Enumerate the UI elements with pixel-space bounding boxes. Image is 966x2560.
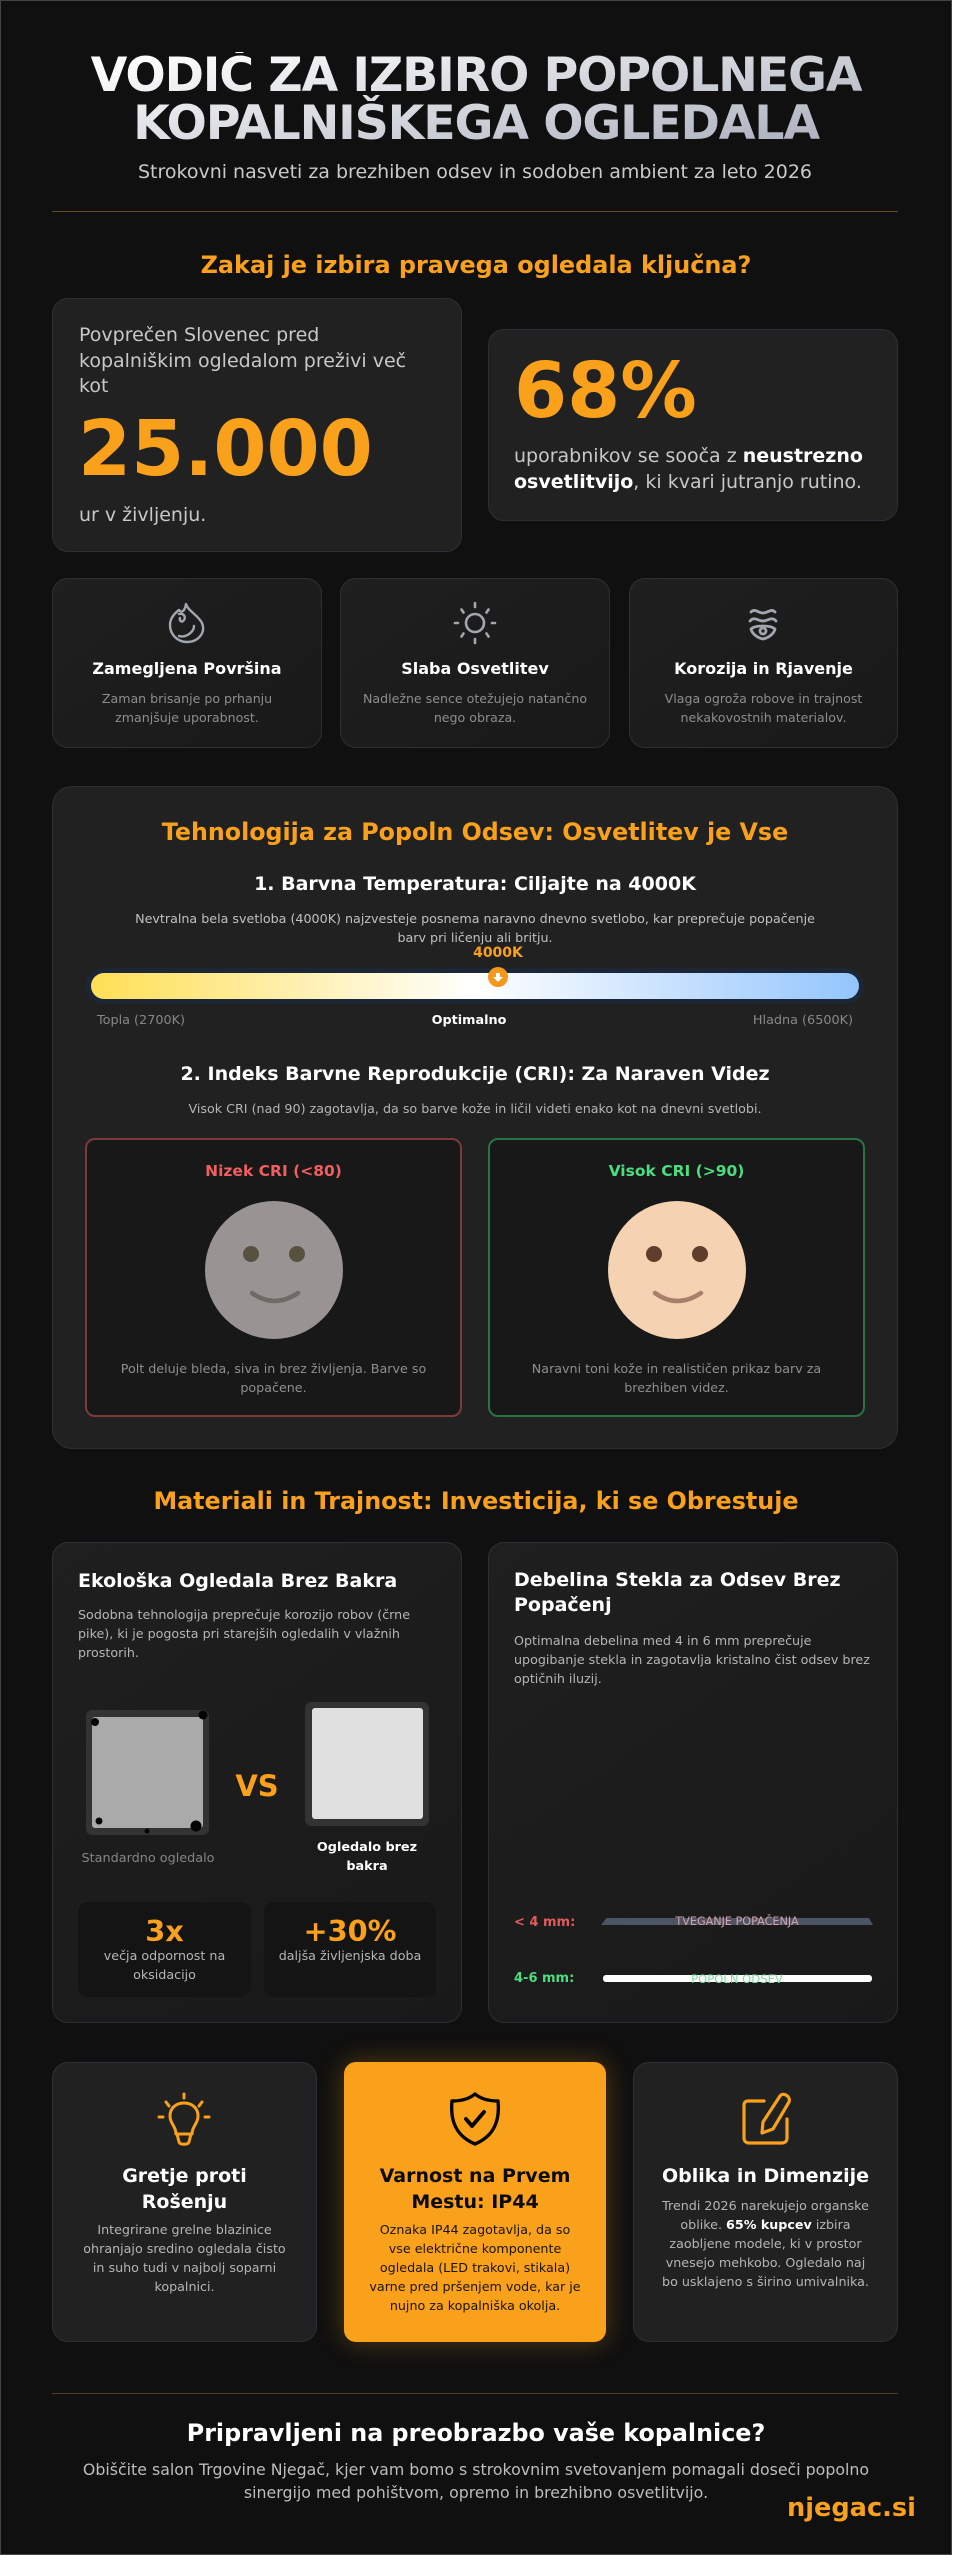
stat text: večja odpornost na [104, 1948, 225, 1963]
stat intro text: kopalniškim ogledalom preživi več [79, 350, 406, 372]
icon: waves and corrosion [748, 609, 778, 640]
face: natural [608, 1201, 746, 1339]
footer text: sinergijo med pohištvom, opremo in brezhibno osvetlitvijo. [244, 2483, 708, 2502]
high CRI text: brezhiben videz. [624, 1380, 729, 1395]
colour temperature text: Nevtralna bela svetloba (4000K) najzvesteje posnema naravno dnevno svetlobo, kar preprečuje popačenje [135, 911, 815, 926]
card text: oblike. 65% kupcev izbira [680, 2217, 851, 2232]
card text: Zaman brisanje po prhanju [102, 691, 272, 706]
stat text: daljša življenjska doba [279, 1948, 421, 1963]
card text: prostorih. [78, 1645, 139, 1660]
card text: nego obraza. [434, 710, 516, 725]
mirror label: copper-free [317, 1840, 417, 1874]
stat value: +30%: +30% [303, 1914, 397, 1948]
card text: nekakovostnih materialov. [681, 710, 846, 725]
panel: corrosion [629, 578, 898, 748]
mirror: copper-free [305, 1702, 429, 1826]
card text: vnesejo mehkobo. Ogledalo naj [666, 2255, 865, 2270]
high CRI title: Visok CRI (>90) [609, 1162, 744, 1180]
panel: shape and size [633, 2062, 898, 2342]
card text: nujno za kopalniška okolja. [390, 2298, 560, 2313]
temperature gradient bar [91, 973, 859, 999]
low CRI title: Nizek CRI (<80) [205, 1162, 342, 1180]
big number: 25.000: 25.000 [78, 405, 373, 494]
panel heading: Tehnologija za Popoln Odsev: Osvetlitev je Vse [162, 818, 788, 846]
card text: varne pred pršenjem vode, kar je [369, 2279, 581, 2294]
colour temperature text [135, 911, 815, 945]
panel: lighting technology [52, 786, 898, 1449]
card text: ogledala (LED trakovi, stikala) [380, 2260, 570, 2275]
divider [52, 2393, 898, 2394]
panel: anti-fog heating [52, 2062, 317, 2342]
scale label: cool: Hladna (6500K) [753, 1013, 853, 1028]
marker label: 4000K: 4000K [473, 945, 523, 961]
high CRI text: Naravni toni kože in realističen prikaz barv za [532, 1361, 821, 1376]
card title: Zamegljena Površina [92, 659, 282, 678]
panel: low CRI [85, 1138, 462, 1417]
card text [363, 691, 587, 725]
icon: sun [454, 602, 496, 644]
stat intro text: Povprečen Slovenec pred [79, 324, 319, 346]
stat intro text: kot [79, 375, 108, 397]
row: thin glass [514, 1914, 873, 1930]
stat text: oksidacijo [133, 1967, 196, 1982]
card text: Optimalna debelina med 4 in 6 mm preprečuje [514, 1633, 811, 1648]
big number: 68%: 68% [514, 347, 697, 436]
card text: zaobljene modele, ki v prostor [669, 2236, 862, 2251]
card text [662, 2198, 869, 2289]
card text: Integrirane grelne blazinice [97, 2222, 272, 2237]
low CRI text: Polt deluje bleda, siva in brez življenja. Barve so [121, 1361, 426, 1376]
card text [664, 691, 862, 725]
card title: Slaba Osvetlitev [401, 659, 549, 678]
panel: 25.000 hours [52, 298, 462, 552]
stat text [104, 1948, 225, 1982]
high CRI text [532, 1361, 821, 1395]
card text: vse električne komponente [389, 2241, 561, 2256]
row label: 4-6 mm: [514, 1971, 574, 1986]
heading: materials: Materiali in Trajnost: Investicija, ki se Obrestuje [153, 1487, 799, 1515]
card text: optičnih iluzij. [514, 1671, 602, 1686]
stat: corrosion resistance [78, 1902, 251, 1997]
card title: Varnost na Prvem [380, 2165, 570, 2187]
thin glass bar [601, 1918, 873, 1925]
icon: droplet [168, 602, 204, 644]
heading: why it matters: Zakaj je izbira pravega ogledala ključna? [201, 251, 751, 279]
row label: < 4 mm: [514, 1915, 575, 1930]
card title: Gretje proti [122, 2165, 247, 2187]
marker: 4000K position [488, 967, 508, 987]
mirror label: standard: Standardno ogledalo [82, 1851, 214, 1866]
card text [369, 2222, 581, 2313]
stat text [514, 445, 863, 493]
low CRI text: popačene. [240, 1380, 307, 1395]
icon: pencil square [742, 2092, 791, 2145]
card text: Oznaka IP44 zagotavlja, da so [380, 2222, 570, 2237]
scale label: warm: Topla (2700K) [97, 1013, 185, 1028]
stat value: 3x: 3x [145, 1914, 184, 1948]
card text [78, 1607, 410, 1660]
card text: zmanjšuje uporabnost. [115, 710, 259, 725]
optimal glass bar [603, 1975, 872, 1982]
CRI text: Visok CRI (nad 90) zagotavlja, da so barve kože in ličil videti enako kot na dnevni svetlobi. [188, 1101, 762, 1116]
thin glass note: TVEGANJE POPAČENJA [675, 1915, 799, 1928]
card text: Sodobna tehnologija preprečuje korozijo robov (črne [78, 1607, 410, 1622]
panel: high CRI [488, 1138, 865, 1417]
panel: IP44 safety [344, 2062, 606, 2342]
stat closing text: ur v življenju. [79, 504, 206, 526]
stat intro text [79, 324, 406, 397]
divider [52, 211, 898, 212]
panel: poor lighting [340, 578, 610, 748]
card text: upogibanje stekla in zagotavlja kristalno čist odsev brez [514, 1652, 870, 1667]
mirror label: copper-free: bakra [346, 1859, 388, 1874]
card title: Korozija in Rjavenje [674, 659, 853, 678]
panel: foggy surface [52, 578, 322, 748]
icon: light bulb [158, 2092, 210, 2146]
card text: Trendi 2026 narekujejo organske [662, 2198, 869, 2213]
scale label: optimal: Optimalno [432, 1013, 506, 1028]
title: KOPALNIŠKEGA OGLEDALA [133, 96, 819, 151]
card title [122, 2165, 247, 2213]
panel: copper-free mirrors [52, 1542, 462, 2023]
card title: Ekološka Ogledala Brez Bakra [78, 1570, 397, 1592]
card text: bo usklajeno s širino umivalnika. [662, 2274, 869, 2289]
card text: in suho tudi v najbolj soparni [93, 2260, 276, 2275]
card text [102, 691, 272, 725]
mirror: standard with corrosion [86, 1710, 209, 1835]
card text: kopalnici. [154, 2279, 215, 2294]
panel: 68% [488, 329, 898, 521]
card title: Rošenju [142, 2191, 227, 2213]
VS label: VS [235, 1769, 279, 1803]
low CRI text [121, 1361, 426, 1395]
card title: Debelina Stekla za Odsev Brez [514, 1569, 841, 1591]
subheading: CRI: 2. Indeks Barvne Reprodukcije (CRI): Za Naraven Videz [180, 1063, 770, 1085]
subheading: colour temperature: 1. Barvna Temperatura: Ciljajte na 4000K [254, 873, 696, 895]
mirror label: copper-free: Ogledalo brez [317, 1840, 417, 1855]
face: pale [205, 1201, 343, 1339]
stat text: osvetlitvijo, ki kvari jutranjo rutino. [514, 471, 862, 493]
subtitle: Strokovni nasveti za brezhiben odsev in sodoben ambient za leto 2026 [138, 161, 812, 183]
card title: Mestu: IP44 [411, 2191, 539, 2213]
card title [514, 1569, 841, 1616]
title [0, 52, 952, 148]
card text: Vlaga ogroža robove in trajnost [665, 691, 862, 706]
footer heading: Pripravljeni na preobrazbo vaše kopalnice? [187, 2419, 765, 2447]
footer text: Obiščite salon Trgovine Njegač, kjer vam bomo s strokovnim svetovanjem pomagali doseči popolno [83, 2460, 869, 2479]
optimal glass note: POPOLN ODSEV [691, 1972, 783, 1986]
card title: Popačenj [514, 1594, 612, 1616]
card text: ohranjajo sredino ogledala čisto [83, 2241, 286, 2256]
footer text [83, 2460, 869, 2502]
stat: service life [264, 1902, 436, 1997]
card text: pike), ki je pogosta pri starejših ogledalih v vlažnih [78, 1626, 400, 1641]
panel: glass thickness [488, 1542, 898, 2023]
icon: shield check [450, 2092, 500, 2146]
card text: Nadležne sence otežujejo natančno [363, 691, 587, 706]
card text [514, 1633, 870, 1686]
brand: njegac.si: njegac.si [787, 2493, 916, 2523]
row: optimal glass [514, 1971, 872, 1986]
colour temperature text: barv pri ličenju ali britju. [397, 930, 553, 945]
card title: Oblika in Dimenzije [662, 2165, 869, 2187]
card text [83, 2222, 286, 2294]
stat text: uporabnikov se sooča z neustrezno [514, 445, 863, 467]
card title [380, 2165, 570, 2213]
title: VODIČ ZA IZBIRO POPOLNEGA [91, 48, 861, 103]
